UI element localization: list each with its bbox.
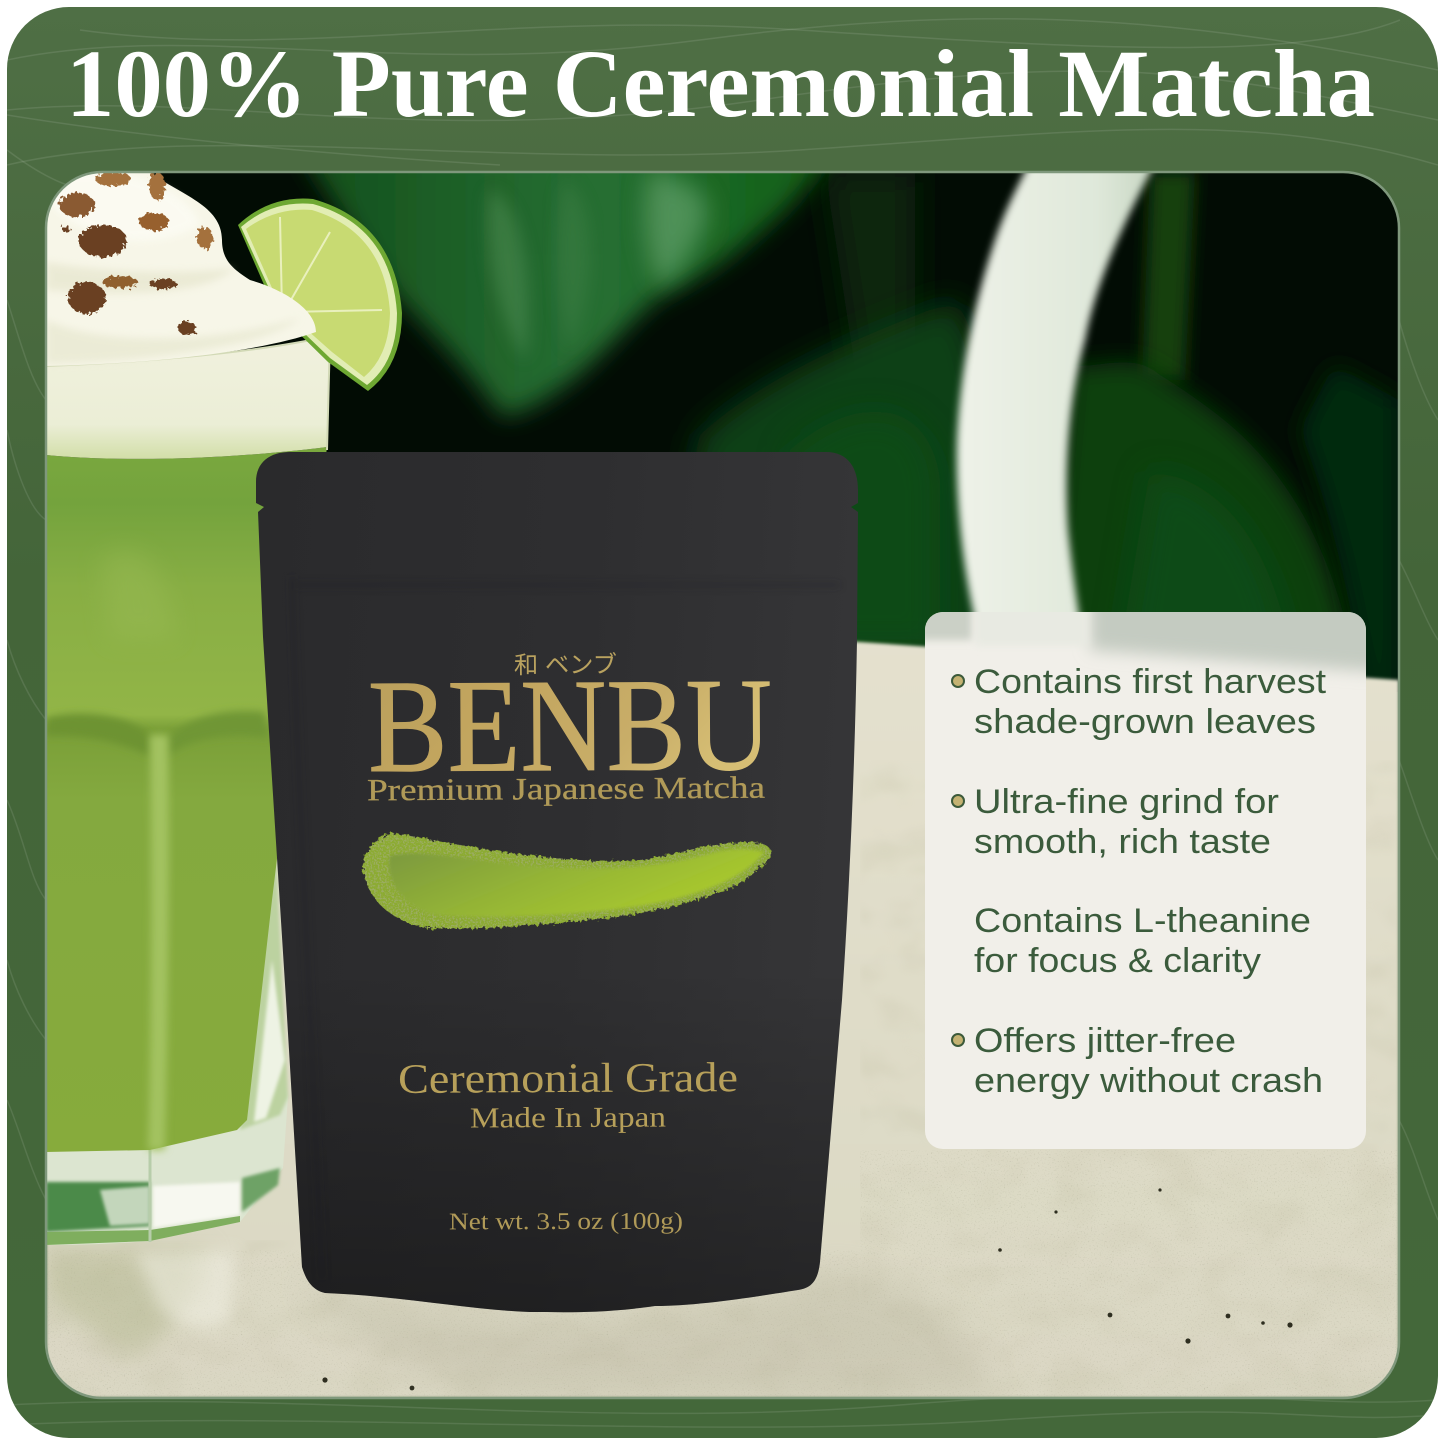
bullet: jitter-free energy: energy without crash (974, 1062, 1323, 1100)
right leaves (1064, 352, 1350, 612)
whipped cream (46, 172, 316, 366)
bullet: first harvest: shade-grown leaves (974, 703, 1316, 741)
glass of matcha (46, 336, 330, 1245)
stems (821, 174, 924, 343)
product subtitle: Premium Japanese Matcha (367, 770, 765, 807)
matcha powder smear (363, 833, 771, 929)
lime wedge (238, 199, 402, 391)
origin label: Made In Japan (470, 1101, 667, 1135)
table surface (46, 636, 1399, 1398)
brown crumbs (59, 172, 213, 335)
text: l-theanine: for focus & clarity (974, 942, 1261, 980)
glass reflection on table (46, 1248, 236, 1360)
japanese brand mark: 和 ベンブ (514, 652, 617, 679)
soft shadow on table (340, 1276, 980, 1394)
upper leaf (300, 150, 835, 417)
glass rim (46, 336, 330, 450)
clear glass strip (239, 860, 289, 1130)
lower leaf (682, 292, 977, 648)
photo inner border (46, 172, 1399, 1398)
glass base (47, 1103, 288, 1245)
text: l-theanine: Contains L-theanine (974, 902, 1311, 940)
bullet: ultra-fine grind (952, 783, 1279, 861)
glass facets (46, 550, 268, 1150)
pouch (256, 452, 858, 1312)
bullet: ultra-fine grind: smooth, rich taste (974, 823, 1271, 861)
background foliage (46, 150, 1399, 700)
bullet: first harvest: Contains first harvest (974, 663, 1327, 701)
brand name: BENBU (368, 650, 772, 800)
drink (46, 447, 327, 1152)
bullet: jitter-free energy (952, 1022, 1323, 1100)
bullet: ultra-fine grind: Ultra-fine grind for (974, 783, 1279, 821)
bullet: jitter-free energy: Offers jitter-free (974, 1022, 1236, 1060)
bullet: first harvest (952, 663, 1327, 741)
white ring handle (957, 160, 1157, 660)
grade label: Ceremonial Grade (398, 1055, 738, 1103)
panel: benefits (905, 596, 1380, 1149)
title: 100% Pure Ceremonial Matcha (66, 30, 1375, 137)
net weight: Net wt. 3.5 oz (100g) (449, 1209, 683, 1235)
panel background (905, 596, 1380, 1149)
foam layer (46, 336, 330, 459)
